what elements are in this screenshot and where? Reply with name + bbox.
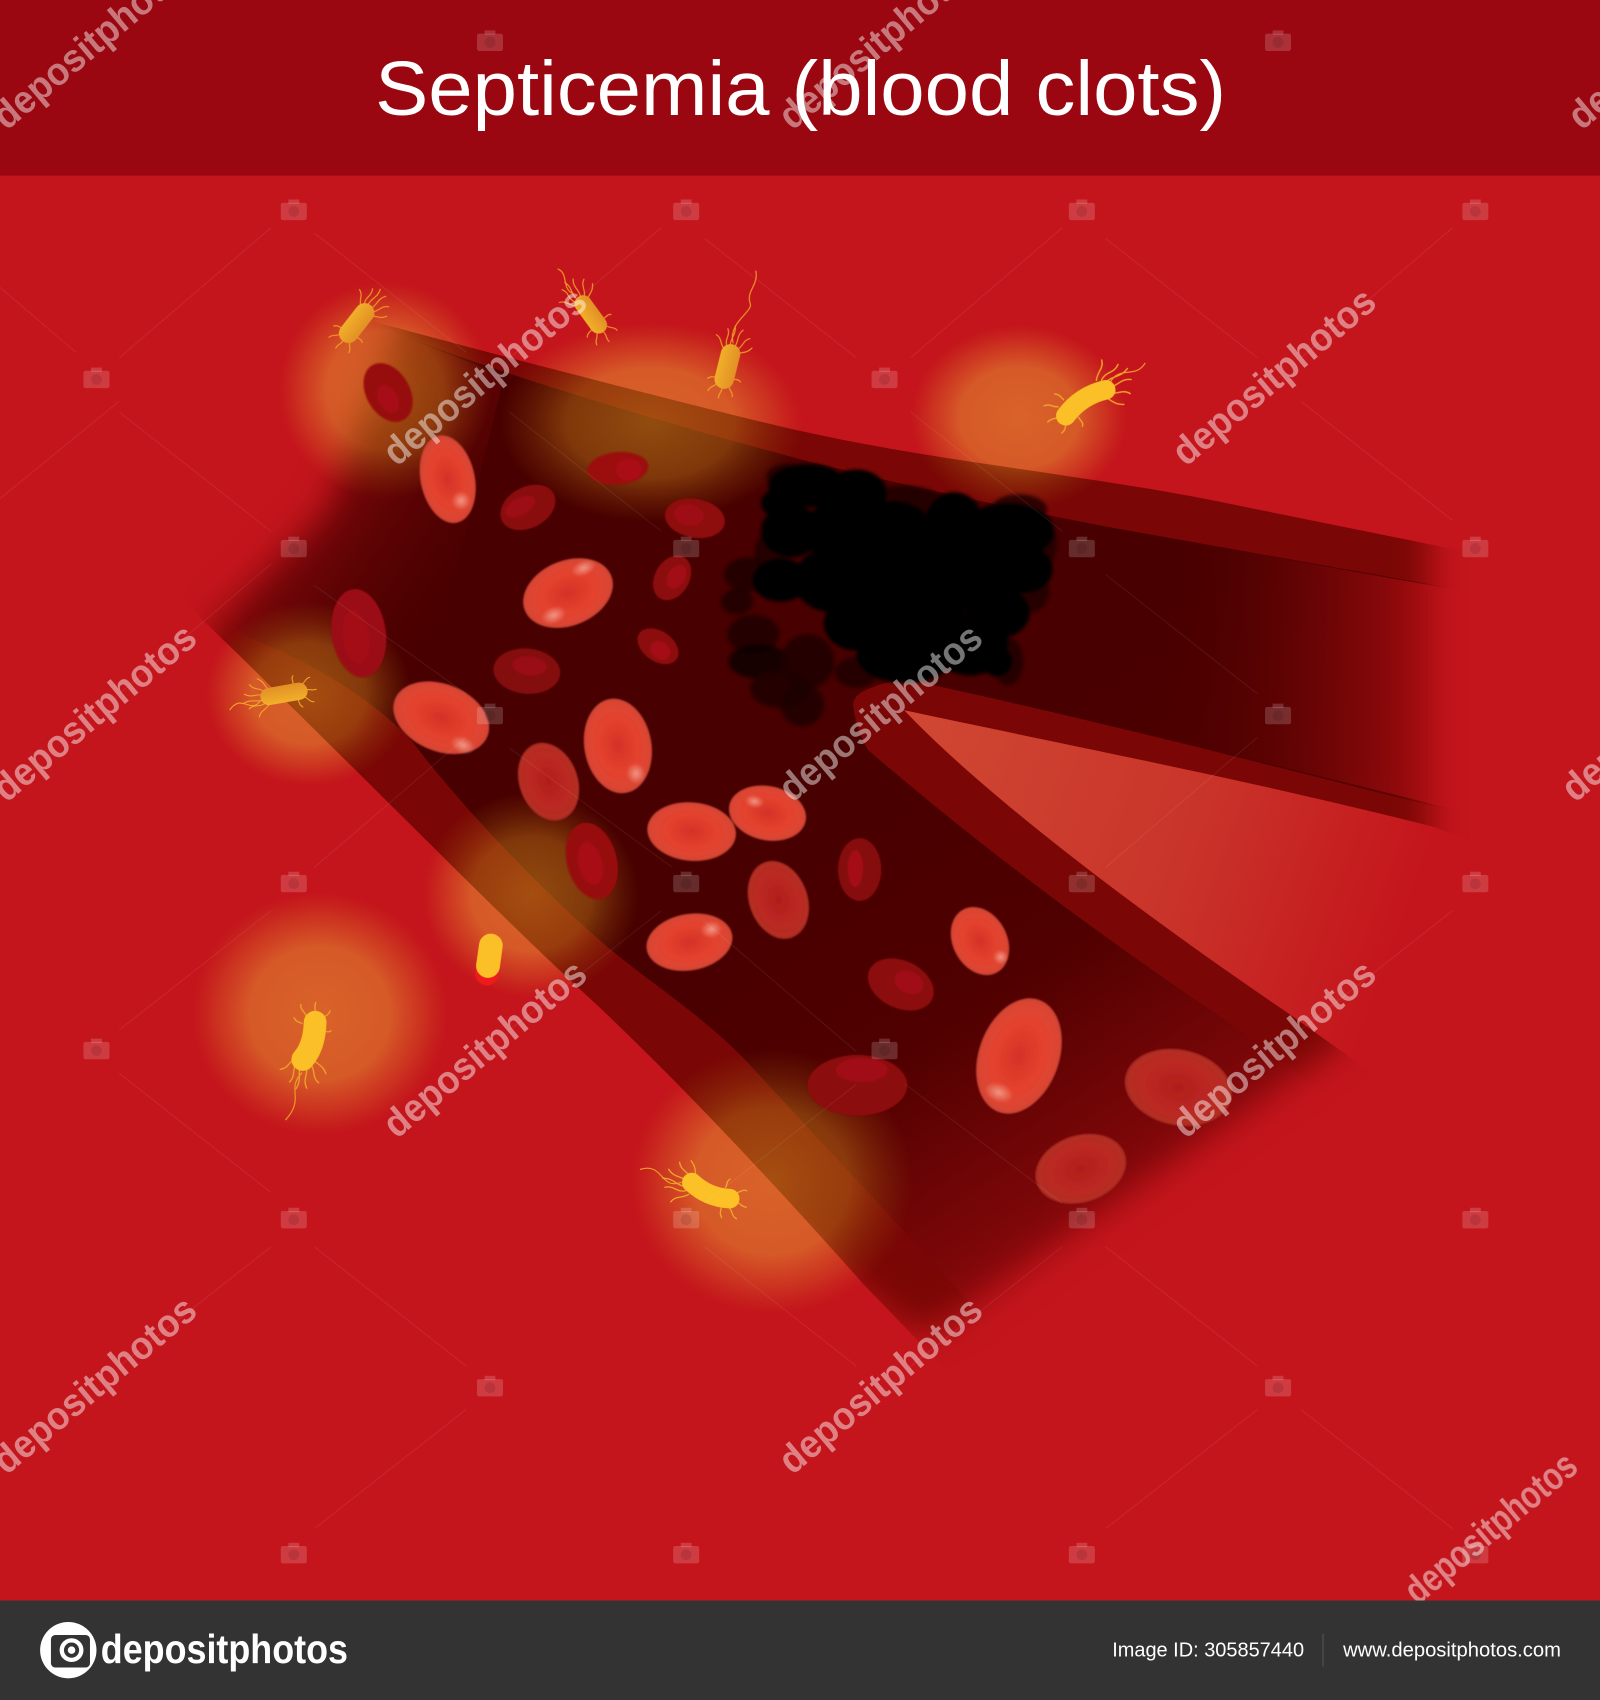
- watermark text: depositphotos: [375, 952, 595, 1146]
- cell: [838, 838, 881, 901]
- vessel wall: [199, 324, 1450, 1349]
- watermark text: depositphotos: [375, 280, 595, 474]
- cell: [808, 1055, 907, 1116]
- blood cells, out of focus: [326, 354, 942, 1116]
- title: Septicemia (blood clots): [375, 46, 1226, 132]
- cell: [513, 545, 623, 641]
- cell: [1117, 1039, 1239, 1136]
- watermark grid lines: [0, 228, 1453, 1529]
- watermark text: depositphotos: [771, 616, 991, 810]
- inflammation glows around bacteria, on tissue: [192, 282, 1127, 1314]
- bacteria: [225, 257, 1158, 1227]
- watermark text: depositphotos: [1164, 280, 1384, 474]
- cell: [939, 897, 1021, 985]
- cell: [354, 354, 423, 431]
- brand name: depositphotos: [101, 1626, 348, 1672]
- cell: [491, 645, 562, 697]
- cell: [645, 549, 699, 607]
- watermark text: depositphotos: [771, 1288, 991, 1482]
- bacterium: [322, 279, 397, 361]
- cell: [724, 779, 811, 848]
- bacterium: [1036, 341, 1158, 444]
- cell: [1026, 1122, 1135, 1215]
- bacterium: [543, 257, 626, 352]
- glows seen through the vessel: [231, 324, 1086, 1272]
- bacterium: [702, 265, 770, 403]
- red blood cells, in focus: [382, 430, 1239, 1215]
- tissue wedge between the vessel branches: [904, 710, 1539, 1095]
- cell: [507, 734, 590, 829]
- blood vessel with branches: [199, 322, 1454, 1349]
- blood clot: [721, 464, 1057, 726]
- lumen fade at right end: [1234, 550, 1448, 806]
- cell: [631, 621, 685, 672]
- watermark camera icons: [83, 30, 1488, 1563]
- watermark text: depositphotos: [1164, 952, 1384, 1146]
- cell: [558, 817, 626, 905]
- cell: [577, 693, 659, 799]
- icon: depositphotos logo: [40, 1622, 96, 1678]
- cell: [326, 585, 392, 681]
- bacterium: [633, 1145, 755, 1227]
- footer bar: [0, 1600, 1600, 1700]
- bacterium: [225, 669, 319, 722]
- cell: [586, 450, 650, 487]
- cell: [412, 430, 483, 528]
- cell: [382, 668, 500, 768]
- title banner: [0, 0, 1600, 176]
- cell: [642, 907, 737, 977]
- cell: [737, 852, 820, 948]
- vessel lumen: [228, 336, 1444, 1294]
- cell: [961, 986, 1077, 1126]
- website: www.depositphotos.com: [1342, 1639, 1561, 1662]
- cell: [492, 475, 563, 539]
- lumen fade at left end: [212, 330, 504, 662]
- cell: [645, 799, 738, 865]
- image id: Image ID: 305857440: [1112, 1639, 1304, 1662]
- bacterium: [473, 932, 504, 987]
- cell: [859, 948, 942, 1021]
- bacterium: [270, 998, 340, 1126]
- cell: [662, 494, 728, 543]
